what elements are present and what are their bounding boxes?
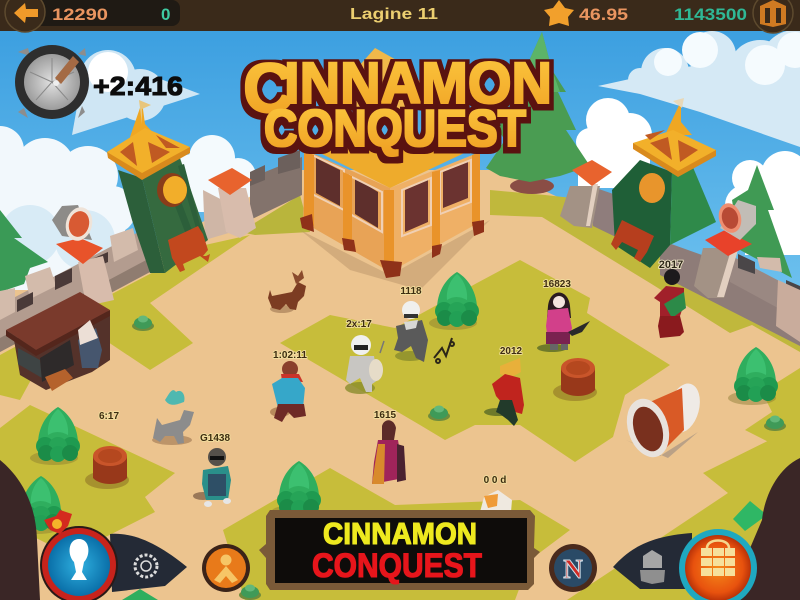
left button group — [40, 510, 187, 600]
character: pink swordswoman: 16823 — [543, 279, 571, 290]
pillar: right wall rear — [560, 160, 612, 228]
bush: right — [728, 347, 778, 405]
bush: lower centre — [271, 461, 321, 519]
pillar: right wall front with drum — [694, 200, 756, 298]
character: grey skeleton: 1118 — [400, 286, 422, 297]
character: hero red scarf: 1:02:11 — [273, 350, 307, 361]
title: C — [243, 49, 294, 127]
star score: 46.95 — [579, 5, 628, 24]
character: grey skeleton — [394, 286, 428, 362]
icon: star — [544, 0, 574, 26]
flash badge — [44, 510, 72, 534]
shrub: left top — [132, 316, 154, 331]
bush: left — [30, 407, 80, 465]
sky background — [0, 28, 800, 288]
icon: stones — [640, 550, 665, 584]
left score pill — [35, 0, 180, 26]
orange character button — [202, 544, 250, 592]
ground — [0, 170, 800, 600]
character: robed woman: 1615 — [374, 410, 397, 421]
character: partly hidden orange hood: 0 0 d — [484, 475, 506, 486]
shop button — [679, 529, 757, 600]
bush: lower left — [13, 476, 63, 534]
stump: centre — [553, 358, 597, 401]
market stall — [6, 292, 110, 391]
N button — [549, 544, 597, 592]
bush: centre — [429, 272, 479, 330]
character: partly hidden orange hood — [480, 475, 512, 512]
coin count: 12290 — [52, 5, 108, 24]
gold total: 1143500 — [674, 5, 747, 24]
music notes — [434, 338, 454, 363]
character: hero red scarf — [270, 350, 307, 422]
icon: crate button — [753, 0, 793, 33]
grass patches — [0, 190, 800, 600]
pillar: left wall rear — [208, 168, 256, 238]
character: red coat gold hat — [484, 346, 524, 426]
tree: left — [0, 210, 48, 292]
barrel cannon — [620, 380, 705, 463]
bush: bottom — [122, 589, 158, 600]
N button: N — [563, 554, 583, 584]
title: INNAMON — [284, 51, 552, 116]
deer: brown — [268, 270, 306, 313]
character: pink swordswoman — [537, 279, 590, 352]
icon: gear — [135, 555, 157, 577]
right button group — [613, 529, 757, 600]
timer dial — [15, 45, 89, 119]
shrub: right — [764, 416, 786, 431]
top bar — [0, 0, 800, 33]
floating label: left field: 6:17 — [99, 411, 119, 422]
character: kneeling green scarf: 2017 — [659, 259, 683, 271]
deer: grey — [152, 390, 194, 445]
gem count: 0 — [161, 5, 170, 24]
back arrow button — [5, 0, 45, 32]
character: kneeling green scarf — [654, 259, 686, 338]
shrub: centre — [428, 406, 450, 421]
character: white skeleton: 2x:17 — [346, 319, 372, 330]
clouds — [0, 30, 800, 290]
level name: Lagine 11 — [350, 6, 438, 23]
character: sunglasses kid: G1438 — [200, 433, 230, 444]
title: CONQUEST — [264, 100, 526, 158]
tower: left — [107, 100, 210, 273]
tree: centre — [486, 32, 590, 194]
bottom title panel — [259, 510, 540, 590]
rock arch: bottom left — [0, 460, 40, 600]
tower: right — [611, 98, 716, 268]
timer value: +2:416 — [93, 71, 183, 101]
bush: lower right — [733, 501, 767, 531]
title — [243, 49, 552, 158]
character: white skeleton — [345, 319, 384, 394]
character: sunglasses kid — [193, 433, 231, 507]
rock arch: bottom right — [735, 458, 800, 600]
shrub: bottom — [239, 584, 261, 600]
stump: left — [85, 446, 129, 489]
pillar: left wall front with drum — [52, 204, 114, 304]
tree: right — [732, 165, 792, 278]
wall: right — [593, 187, 800, 346]
character: red coat gold hat: 2012 — [500, 346, 523, 357]
character: robed woman — [372, 410, 406, 484]
bottom title panel: CONQUEST — [312, 547, 482, 585]
central building — [300, 48, 490, 290]
trophy button — [40, 526, 118, 600]
wall: left — [0, 150, 302, 352]
bottom title panel: CINNAMON — [323, 516, 477, 551]
